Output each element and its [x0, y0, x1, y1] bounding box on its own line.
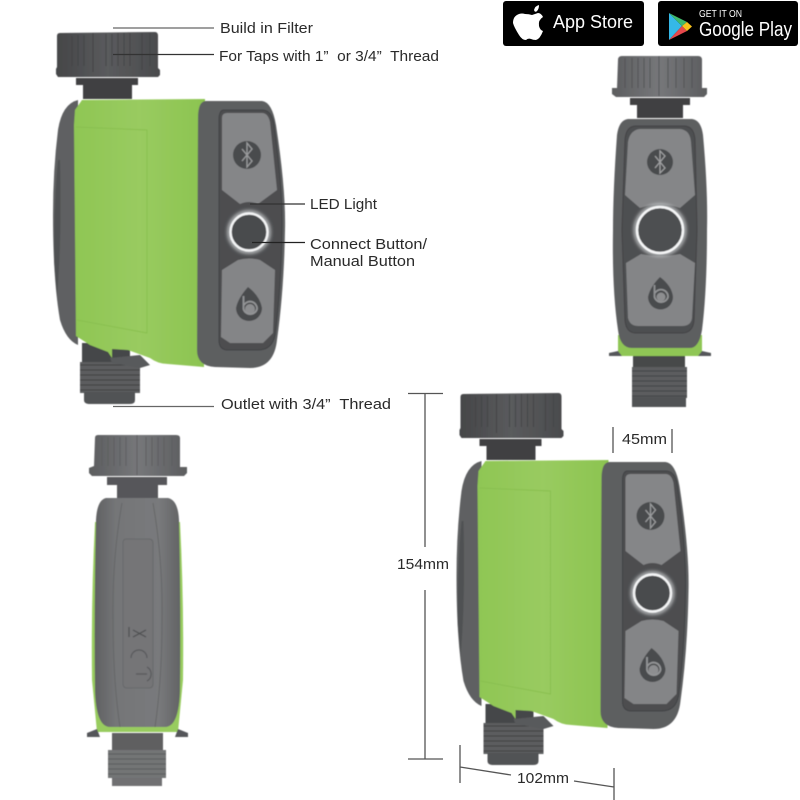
icon: CE mark [131, 650, 151, 681]
badge: Google Play [658, 1, 798, 46]
badge: Google Play: GET IT ON [699, 9, 742, 20]
callout: outlet thread: Outlet with 3/4” Thread [221, 396, 391, 413]
callout: LED Light [250, 196, 378, 213]
callout: tap thread: For Taps with 1” or 3/4” Thread [219, 48, 439, 65]
dimension: width 102mm [460, 745, 614, 800]
callout: connect and manual button [252, 236, 428, 270]
product: front view [609, 56, 711, 407]
icon: disposal mark [129, 627, 146, 637]
callout: connect and manual button: Connect Button/ [310, 236, 428, 253]
badge: App Store: App Store [553, 12, 633, 32]
dimension: depth 45mm [613, 427, 672, 453]
dimension: height 154mm [397, 394, 449, 759]
dimension: width 102mm: 102mm [517, 770, 569, 787]
product: back view [87, 435, 188, 786]
dimension: height 154mm: 154mm [397, 556, 449, 573]
callout: LED Light: LED Light [310, 196, 378, 213]
icon: apple logo [513, 5, 543, 40]
callout: Build in Filter: Build in Filter [220, 20, 313, 37]
dimension: depth 45mm: 45mm [622, 431, 667, 448]
product: angled view with dimensions [397, 393, 689, 800]
icon: play triangle [669, 13, 692, 40]
callout: connect and manual button: Manual Button [310, 253, 415, 270]
badge: App Store [503, 1, 644, 46]
product: angled view with callouts [53, 20, 439, 413]
